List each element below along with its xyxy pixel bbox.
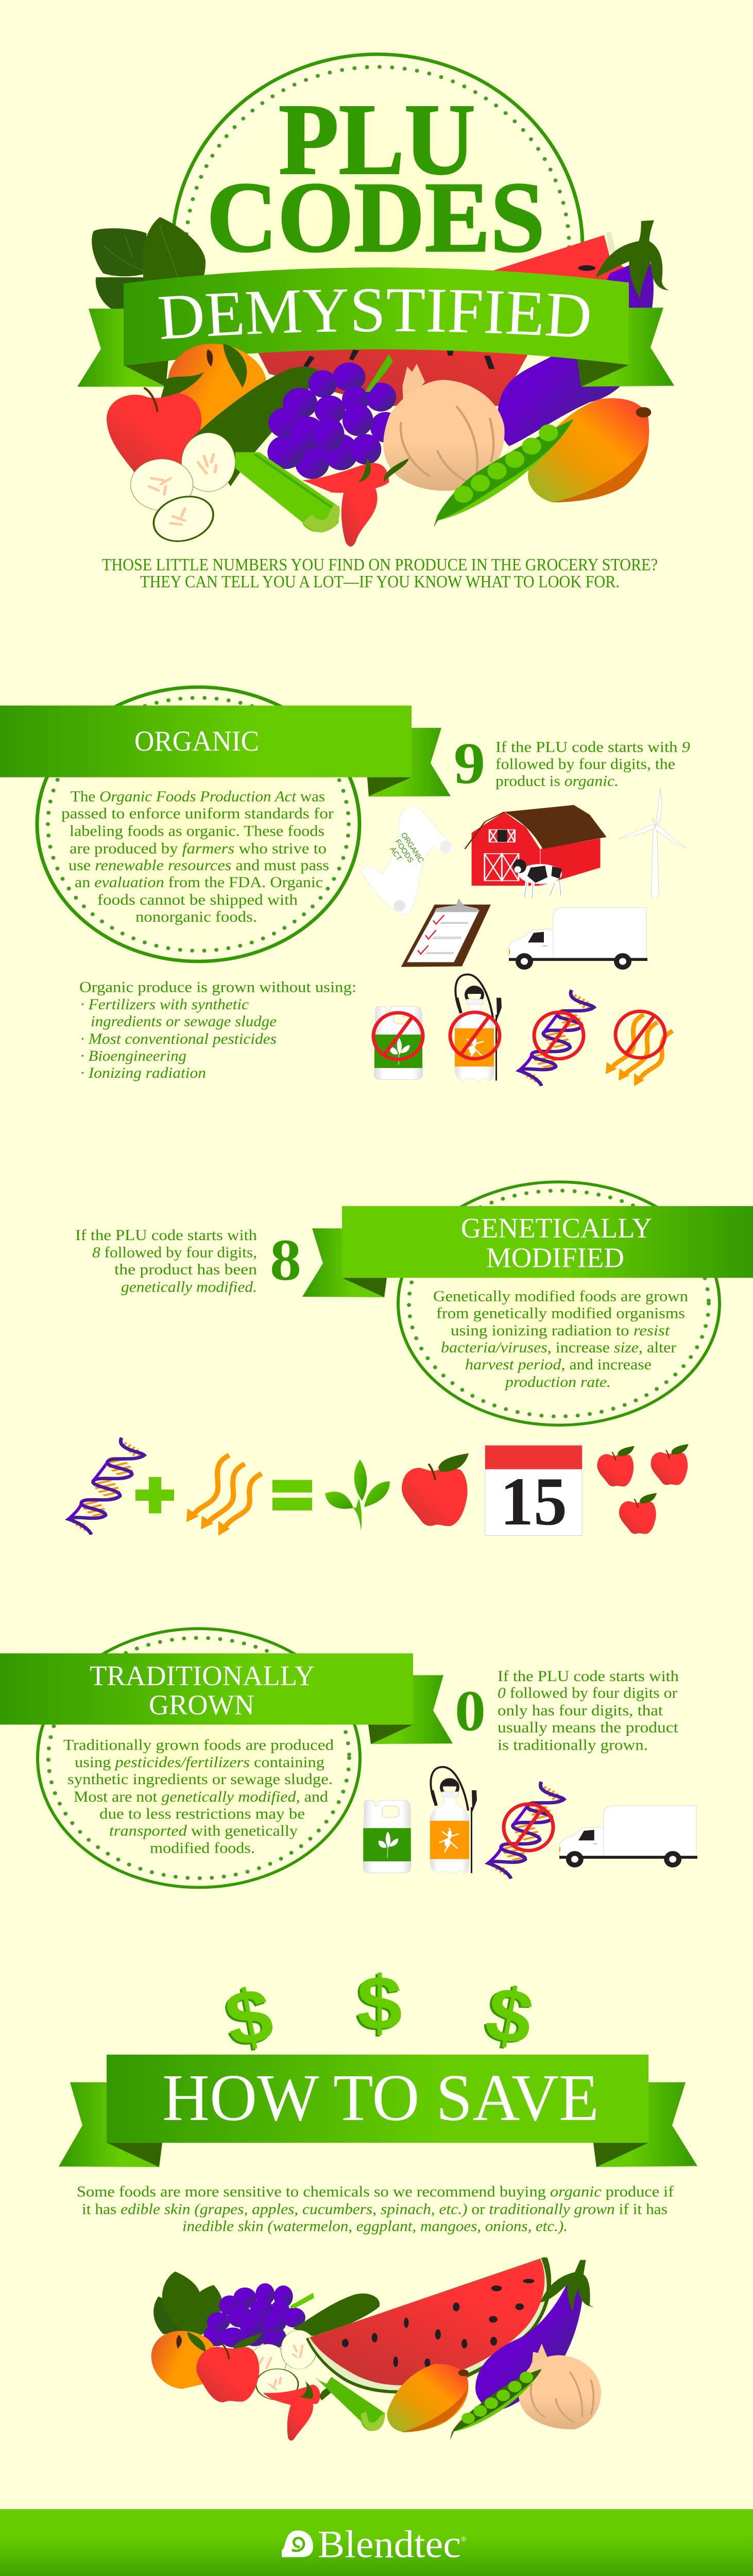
grapes <box>203 2283 305 2348</box>
code explanation: If the PLU code starts with <box>75 1226 257 1244</box>
chili peppers <box>302 458 409 547</box>
traditional badge text <box>63 1736 334 1856</box>
grapes <box>267 363 401 479</box>
save ribbon <box>59 2055 697 2167</box>
heading: traditionally grown: TRADITIONALLY <box>90 1661 315 1692</box>
back produce: leaves, watermelon, eggplant <box>92 217 669 446</box>
icon: dollar signs: $ <box>355 1961 400 2047</box>
icon: dollar signs: $ <box>217 1973 278 2065</box>
main ribbon with tails <box>77 267 674 387</box>
code explanation <box>498 1667 679 1753</box>
pea pod <box>450 2369 542 2441</box>
intro text: THEY CAN TELL YOU A LOT—IF YOU KNOW WHAT TO LOOK FOR. <box>140 572 620 591</box>
heading: how to save: HOW TO SAVE <box>162 2061 599 2134</box>
heading: genetically modified: GENETICALLY <box>461 1213 652 1244</box>
grown-without list: Organic produce is grown without using: <box>79 978 356 995</box>
heading: genetically modified: MODIFIED <box>486 1243 624 1274</box>
traditional badge text: synthetic ingredients or sewage sludge. <box>67 1770 333 1788</box>
organic badge text: use renewable resources and must pass <box>69 856 329 874</box>
grape stem <box>289 2293 314 2309</box>
apple <box>107 388 202 472</box>
intro text <box>102 555 658 591</box>
icon: dollar signs <box>217 1960 540 2065</box>
code explanation <box>75 1226 258 1295</box>
heading: traditionally grown: GROWN <box>149 1690 254 1721</box>
orange <box>158 344 266 434</box>
advice text: it has edible skin (grapes, apples, cucumbers, spinach, etc.) or traditionally grown if it has <box>82 2200 668 2217</box>
code explanation: 0 followed by four digits or <box>498 1684 678 1701</box>
icon: banned radiation <box>606 1011 673 1086</box>
cucumber <box>192 367 322 486</box>
grown-without list: · Fertilizers with synthetic <box>80 995 249 1013</box>
heading: organic: ORGANIC <box>134 725 259 757</box>
heading: traditionally grown <box>90 1661 315 1721</box>
icon: not genetically modified <box>488 1782 564 1879</box>
icon: delivery truck <box>559 1806 697 1868</box>
icon: barn <box>465 805 607 886</box>
hero badge <box>77 53 674 547</box>
icon: banned bioengineering <box>519 990 594 1086</box>
intro text: THOSE LITTLE NUMBERS YOU FIND ON PRODUCE IN THE GROCERY STORE? <box>102 555 658 574</box>
traditional badge text: due to less restrictions may be <box>99 1805 305 1822</box>
grape stem <box>365 353 393 392</box>
celery <box>315 2377 385 2431</box>
icon: three small apples <box>597 1444 689 1534</box>
logo spiral <box>282 2531 313 2557</box>
code explanation: only has four digits, that <box>498 1701 663 1719</box>
icon: pesticide sprayer <box>430 1767 477 1874</box>
panel: organic <box>0 687 690 1086</box>
icon: dna <box>69 1438 144 1535</box>
traditional badge <box>38 1629 360 1887</box>
chili peppers <box>263 2381 334 2441</box>
orange <box>151 2331 215 2389</box>
icon: delivery truck organic <box>509 908 647 970</box>
registered mark: ® <box>461 2536 467 2543</box>
icon: dollar signs: $ <box>357 1960 402 2046</box>
icon: wind turbine <box>618 788 686 897</box>
produce group <box>151 2257 601 2441</box>
code explanation: 8 followed by four digits, <box>92 1244 257 1261</box>
organic ribbon <box>0 705 451 796</box>
heading: genetically modified <box>461 1213 652 1274</box>
traditional badge text: transported with genetically <box>109 1822 298 1839</box>
advice text: inedible skin (watermelon, eggplant, mangoes, onions, etc.). <box>182 2217 568 2234</box>
code digit 8: 8 <box>270 1227 301 1293</box>
icon: plus <box>135 1477 174 1513</box>
grown-without list <box>79 978 356 1081</box>
ribbon text: DEMYSTIFIED: DEMYSTIFIED <box>159 289 589 339</box>
code explanation: is traditionally grown. <box>498 1736 648 1753</box>
icon: dollar signs: $ <box>477 1971 538 2063</box>
icon: act scroll <box>361 806 454 915</box>
icon: banned fertilizer <box>373 1007 423 1080</box>
organic badge <box>37 687 360 961</box>
apple <box>196 2333 262 2402</box>
traditional badge text: Most are not genetically modified, and <box>74 1788 328 1805</box>
logo wordmark: Blendtec <box>318 2522 461 2566</box>
eggplant <box>475 2260 593 2412</box>
title: PLU: PLU <box>279 83 475 196</box>
icon: fertilizer jug <box>363 1800 411 1873</box>
gm badge text: Genetically modified foods are grown <box>433 1287 688 1304</box>
icon: calendar 15: 15 <box>500 1463 567 1539</box>
code explanation: If the PLU code starts with <box>498 1667 679 1685</box>
organic badge text <box>61 788 334 925</box>
traditional ribbon <box>0 1653 453 1744</box>
icon: act scroll: ACT <box>388 846 403 862</box>
code digit 9: 9 <box>454 730 485 796</box>
gm badge text: harvest period, and increase <box>465 1355 652 1373</box>
organic badge text: foods cannot be shipped with <box>97 891 298 908</box>
onion <box>519 2344 601 2429</box>
organic badge text: The Organic Foods Production Act was <box>71 788 325 805</box>
equation row <box>69 1438 689 1539</box>
leaves <box>153 2272 222 2337</box>
cucumber slices <box>250 2330 316 2400</box>
organic badge text: passed to enforce uniform standards for <box>61 804 334 822</box>
title: CODES: CODES <box>207 161 545 273</box>
icon: calendar 15 <box>485 1445 582 1539</box>
icon: dollar signs: $ <box>219 1971 279 2063</box>
watermelon <box>306 2257 551 2394</box>
front produce <box>107 344 651 550</box>
gm badge text: using ionizing radiation to resist <box>451 1321 670 1339</box>
celery <box>235 452 340 533</box>
icon: banned pesticide <box>450 974 502 1081</box>
mango <box>387 2364 469 2432</box>
gm badge text: bacteria/viruses, increase size, alter <box>441 1338 677 1356</box>
icon: clipboard <box>401 898 491 967</box>
icon: cow <box>513 859 562 898</box>
code explanation: product is organic. <box>495 772 619 789</box>
gm ribbon <box>302 1206 753 1297</box>
gm badge text: from genetically modified organisms <box>436 1304 685 1321</box>
icon: dollar signs: $ <box>480 1970 540 2062</box>
grown-without list: ingredients or sewage sludge <box>91 1012 277 1030</box>
pea pod <box>434 419 574 527</box>
gm badge <box>398 1182 720 1425</box>
code explanation: followed by four digits, the <box>495 755 675 772</box>
code explanation <box>495 738 690 789</box>
gm badge text: production rate. <box>504 1373 611 1391</box>
icon: sprout <box>325 1460 390 1531</box>
icon: act scroll: ORGANIC <box>399 831 425 864</box>
traditional badge text: using pesticides/fertilizers containing <box>75 1753 324 1771</box>
panel: traditionally grown <box>0 1629 697 1887</box>
organic badge text: an evaluation from the FDA. Organic <box>75 873 323 891</box>
cucumber slices <box>131 433 235 550</box>
advice text: Some foods are more sensitive to chemicals so we recommend buying organic produce if <box>77 2182 674 2200</box>
traditional badge text: modified foods. <box>150 1839 255 1856</box>
grown-without list: · Most conventional pesticides <box>80 1030 277 1047</box>
organic badge text: nonorganic foods. <box>135 908 257 925</box>
code explanation: usually means the product <box>498 1718 678 1736</box>
icon: act scroll: FOODS <box>393 838 415 865</box>
footer bar <box>0 2509 753 2576</box>
grown-without list: · Ionizing radiation <box>80 1064 206 1081</box>
cucumber <box>293 2294 380 2337</box>
panel: genetically modified <box>69 1182 753 1539</box>
icon: equals <box>272 1480 312 1511</box>
gm badge text <box>433 1287 688 1391</box>
badge circle <box>172 53 584 269</box>
code explanation: the product has been <box>114 1261 258 1278</box>
mango <box>528 398 651 502</box>
code explanation: genetically modified. <box>121 1278 257 1295</box>
advice text <box>77 2182 674 2234</box>
onion <box>383 364 505 491</box>
code digit 0: 0 <box>455 1679 486 1743</box>
traditional badge text: Traditionally grown foods are produced <box>63 1736 334 1753</box>
icon: radiation waves <box>186 1455 262 1536</box>
organic badge text: labeling foods as organic. These foods <box>70 822 324 839</box>
organic badge text: are produced by farmers who strive to <box>70 839 327 857</box>
grown-without list: · Bioengineering <box>80 1047 186 1064</box>
icon: large apple <box>402 1453 469 1526</box>
panel: how to save <box>59 1960 697 2441</box>
code explanation: If the PLU code starts with 9 <box>495 738 690 756</box>
